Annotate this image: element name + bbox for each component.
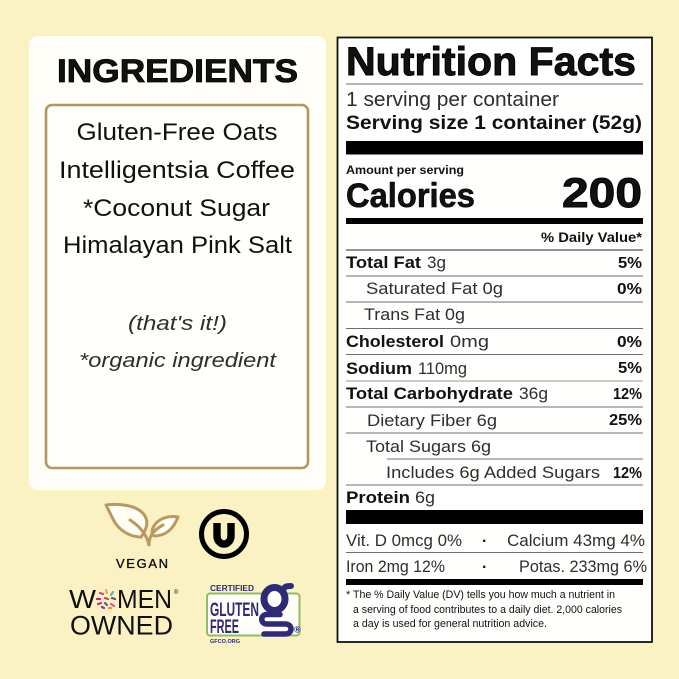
icon: orthodox union kosher mark [202, 512, 246, 556]
logo: women owned: MEN [117, 584, 172, 614]
footnote: The % Daily Value (DV) tells you how much a nutrient in [353, 589, 615, 601]
row: iron and potassium: · [482, 559, 487, 576]
footnote: a day is used for general nutrition advice. [353, 618, 547, 630]
heading: ingredients: INGREDIENTS [57, 53, 298, 89]
row: trans fat: Trans Fat 0g [364, 305, 465, 324]
row: total sugars: Total Sugars 6g [366, 437, 491, 456]
row: cholesterol: Cholesterol [346, 332, 444, 351]
serving size: Serving size 1 container (52g) [346, 113, 642, 134]
row: added sugars: Includes 6g Added Sugars [386, 463, 600, 482]
panel: nutrition facts label [338, 38, 652, 642]
ingredient: salt: Himalayan Pink Salt [63, 232, 292, 259]
heading: nutrition facts: Nutrition Facts [346, 40, 636, 84]
logo: certified gluten free: FREE [210, 616, 239, 638]
logo: certified gluten free: ® [294, 624, 301, 634]
logo: certified gluten free: GFCO.ORG [210, 639, 240, 645]
row: saturated fat: Saturated Fat 0g [366, 279, 503, 298]
logo: women owned: W [69, 584, 96, 614]
row: protein: 6g [415, 488, 435, 507]
row: dietary fiber: 25% [609, 412, 642, 429]
row: iron and potassium: Potas. 233mg 6% [519, 557, 647, 576]
icon: confetti o [97, 590, 115, 608]
row: cholesterol [346, 332, 642, 351]
row: dietary fiber [367, 411, 642, 430]
calories label: Calories [346, 177, 475, 215]
calories value: 200 [562, 169, 642, 216]
footnote: * [346, 589, 351, 601]
daily value header: % Daily Value* [541, 229, 643, 245]
footnote [346, 589, 622, 630]
row: total carbohydrate: 36g [519, 384, 548, 403]
row: sodium [346, 359, 642, 378]
row: vitamin d and calcium: Vit. D 0mcg 0% [346, 531, 462, 550]
row: added sugars: 12% [613, 465, 642, 482]
row: iron and potassium: Iron 2mg 12% [346, 557, 445, 576]
row: cholesterol: 0% [617, 334, 642, 351]
row: iron and potassium [346, 557, 647, 576]
note: that's it: (that's it!) [128, 313, 227, 335]
row: total fat: Total Fat [346, 253, 421, 272]
row: vitamin d and calcium: · [482, 533, 487, 550]
servings per container: 1 serving per container [346, 89, 559, 111]
logo: women owned: ® [174, 589, 179, 596]
ingredient: coconut sugar: *Coconut Sugar [83, 195, 270, 222]
row: total fat [346, 253, 642, 272]
row: dietary fiber: Dietary Fiber 6g [367, 411, 497, 430]
row: sodium: 5% [618, 360, 642, 377]
row: cholesterol: 0mg [450, 332, 489, 351]
row: total fat: 3g [427, 253, 446, 272]
label: vegan: VEGAN [116, 556, 168, 571]
row: total carbohydrate: 12% [613, 386, 642, 403]
amount per serving: Amount per serving [346, 163, 464, 177]
footnote: a serving of food contributes to a daily diet. 2,000 calories [353, 604, 622, 616]
row: vitamin d and calcium: Calcium 43mg 4% [507, 531, 645, 550]
logo: certified gluten free [207, 583, 301, 645]
icon: vegan leaves [106, 504, 178, 545]
row: total fat: 5% [618, 255, 642, 272]
row: vitamin d and calcium [346, 531, 645, 550]
row: sodium: Sodium [346, 359, 412, 378]
ingredients list box [46, 105, 308, 468]
logo: women owned [69, 584, 179, 640]
ingredient: oats: Gluten-Free Oats [76, 119, 278, 146]
logo: certified gluten free: CERTIFIED [210, 583, 254, 593]
row: protein [346, 488, 435, 507]
row: total carbohydrate: Total Carbohydrate [346, 384, 513, 403]
logo: women owned: OWNED [70, 610, 173, 640]
ingredient: coffee: Intelligentsia Coffee [59, 157, 295, 184]
panel: ingredients [29, 36, 326, 490]
logo: certified gluten free: GLUTEN [210, 599, 259, 621]
row: saturated fat [366, 279, 642, 298]
row: saturated fat: 0% [617, 281, 642, 298]
note: organic ingredient: *organic ingredient [79, 350, 278, 372]
row: total carbohydrate [346, 384, 642, 403]
row: sodium: 110mg [418, 359, 467, 378]
row: protein: Protein [346, 488, 410, 507]
